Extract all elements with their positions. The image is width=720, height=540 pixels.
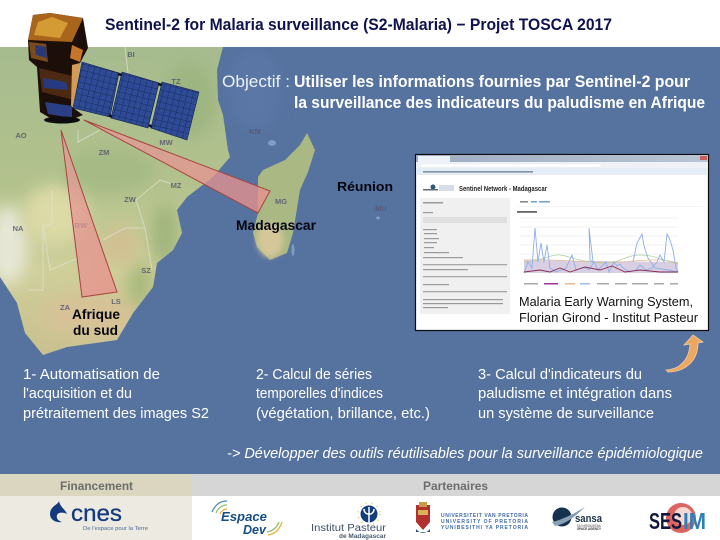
screenshot caption: Florian Girond - Institut Pasteur — [519, 310, 699, 325]
logo: SANSA: sansa — [575, 513, 603, 525]
country codes: AO — [15, 131, 27, 140]
arrow: from step 3 to screenshot — [666, 335, 703, 372]
islands: Reunion, Mauritius — [268, 140, 380, 256]
country codes: SZ — [141, 266, 151, 275]
text block: step 3: paludisme et intégration dans — [478, 386, 672, 402]
logo: University of Pretoria: UNIVERSITY OF PRETORIA — [441, 519, 528, 525]
country codes: MW — [159, 138, 174, 147]
dashboard heading — [423, 184, 547, 193]
place label: Madagascar: Madagascar — [236, 218, 317, 233]
screenshot caption: Malaria Early Warning System, — [519, 294, 693, 309]
logo: Espace Dev: Dev — [243, 522, 267, 537]
place label: Afrique du sud: du sud — [73, 323, 118, 338]
country codes: ZM — [99, 148, 109, 157]
objective text: Utiliser les informations fournies par Sentinel-2 pour — [294, 72, 690, 91]
conclusion text: -> Développer des outils réutilisables pour la surveillance épidémiologique — [227, 446, 703, 462]
tabs — [517, 201, 705, 213]
place label: Afrique du sud — [72, 307, 120, 338]
place label: Reunion: Réunion — [337, 179, 393, 194]
place label: Afrique du sud: Afrique — [72, 307, 120, 322]
title: Sentinel-2 for Malaria surveillance (S2-Malaria) − Projet TOSCA 2017 — [105, 16, 612, 34]
country codes: ZA — [60, 303, 71, 312]
text block: step 2: 2- Calcul de séries — [256, 367, 372, 383]
logo: Institut Pasteur de Madagascar: Institut Pasteur — [311, 523, 387, 534]
logo: Espace Dev: Espace — [221, 509, 267, 524]
logo: SANSA: SOUTH AFRICAN NATIONAL — [577, 524, 601, 528]
screenshot caption — [519, 294, 699, 325]
logo: SEAS / SESTIM — [649, 503, 706, 534]
land: southern Africa — [0, 47, 230, 355]
objective text: Objectif : — [222, 72, 290, 91]
logo: CNES: De l'espace pour la Terre — [83, 526, 148, 532]
country codes: LS — [111, 297, 121, 306]
funding heading: Financement — [60, 479, 133, 493]
panel: partners — [192, 474, 720, 540]
country codes: TZ — [171, 77, 181, 86]
header band — [0, 0, 720, 47]
country codes: NA — [13, 224, 24, 233]
country codes: MG — [275, 197, 287, 206]
land: Madagascar — [253, 133, 315, 260]
logo: University of Pretoria — [416, 502, 528, 533]
text block: step 3: 3- Calcul d'indicateurs du — [478, 367, 642, 383]
logo: University of Pretoria: UNIVERSITEIT VAN PRETORIA — [441, 513, 528, 519]
logo: University of Pretoria: YUNIBESITHI YA PRETORIA — [441, 525, 528, 531]
logo: Espace Dev — [212, 501, 282, 537]
text block: step 1: prétraitement des images S2 — [23, 406, 209, 422]
logo: SEAS / SESTIM: IM — [683, 508, 706, 534]
country codes: ZW — [124, 195, 137, 204]
sidebar — [420, 198, 510, 314]
logo: CNES: cnes — [71, 500, 122, 526]
logo: SANSA — [552, 507, 603, 531]
footprint cone: Madagascar — [84, 120, 270, 213]
logo: Institut Pasteur de Madagascar: de Madagascar — [339, 534, 387, 540]
dashboard heading: Sentinel Network - Madagascar — [459, 184, 547, 193]
footprint cone: South Africa — [61, 130, 117, 297]
logo: SANSA: SPACE AGENCY — [577, 526, 601, 531]
logo: CNES — [50, 500, 148, 532]
map background — [0, 47, 720, 474]
panel: Malaria Early Warning System screenshot — [416, 154, 708, 330]
text block: step 1: 1- Automatisation de — [23, 367, 160, 383]
text block: step 1: l'acquisition et du — [23, 386, 132, 402]
logo: Institut Pasteur de Madagascar — [311, 503, 387, 540]
panel: funding — [0, 474, 192, 540]
solar panels — [73, 62, 199, 140]
browser bar — [416, 155, 708, 175]
country codes: MU — [375, 204, 387, 213]
country codes: MZ — [171, 181, 182, 190]
country codes: BW — [75, 221, 88, 230]
text block: step 2 — [256, 367, 430, 422]
objective text — [222, 72, 705, 112]
line chart: fever indicators — [520, 218, 678, 273]
partners heading: Partenaires — [423, 479, 488, 493]
country codes: BI — [127, 50, 135, 59]
chart legend — [524, 283, 678, 284]
text block: step 3 — [478, 367, 672, 422]
country codes: KM — [249, 127, 261, 136]
text block: step 2: temporelles d'indices — [256, 386, 383, 402]
icon: Sentinel-2 satellite — [28, 13, 199, 140]
country codes — [13, 50, 387, 312]
text block: step 2: (végétation, brillance, etc.) — [256, 406, 430, 422]
text block: step 3: un système de surveillance — [478, 406, 654, 422]
text block: step 1 — [23, 367, 209, 422]
logo: SEAS / SESTIM: SES — [649, 508, 682, 534]
